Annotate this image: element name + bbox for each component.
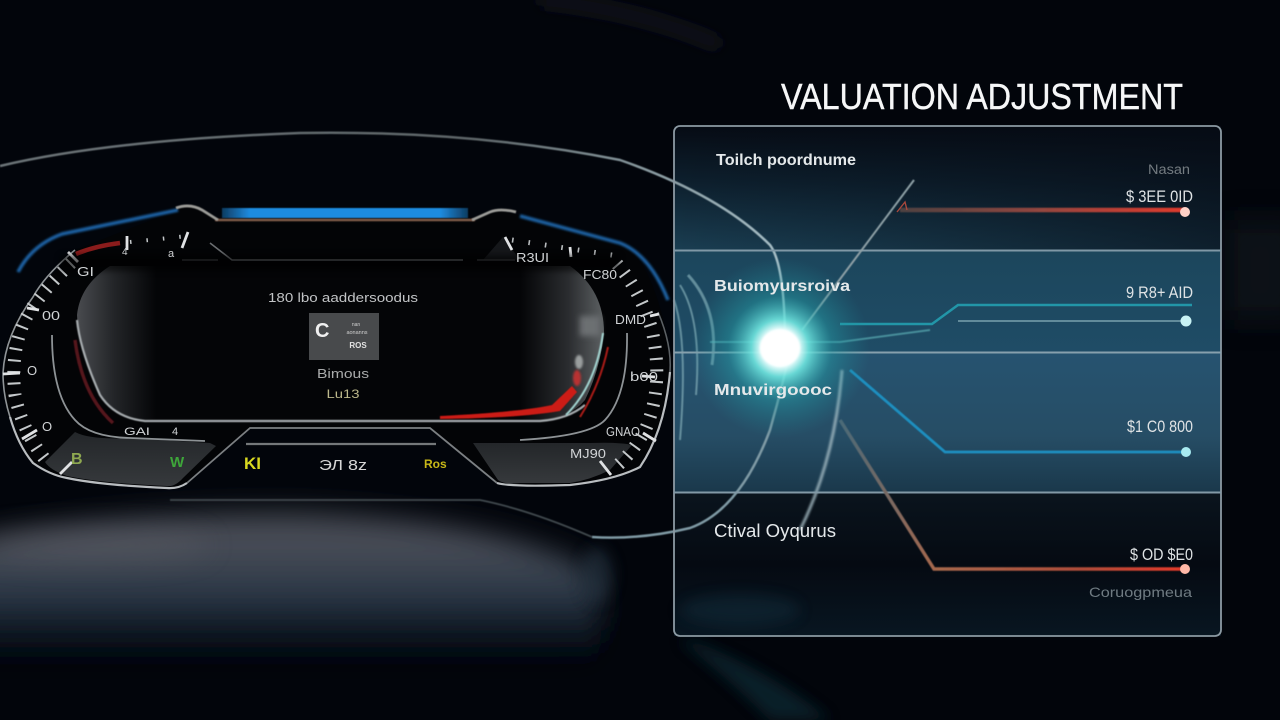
- card small label: nan: [352, 322, 360, 328]
- screen red accent outer right: [580, 347, 608, 417]
- value 2: 9 R8+ AID: [1126, 284, 1193, 302]
- teal upper end dot: [1180, 316, 1192, 326]
- right gauge ticks: [617, 264, 657, 465]
- title: VALUATION ADJUSTMENT: [781, 76, 1183, 117]
- central screen: [77, 266, 604, 420]
- gauge numerals left: 4: [172, 426, 178, 438]
- red top end dot: [1180, 207, 1190, 217]
- row 4 background: [674, 493, 1221, 636]
- left gauge ticks: [14, 262, 72, 458]
- card value: ROS: [349, 341, 367, 350]
- bottom glow: [680, 594, 800, 626]
- connector: red bottom: [840, 420, 1190, 574]
- screen sublabel: Lu13: [326, 387, 360, 401]
- background haze: right band: [1225, 220, 1280, 320]
- green indicators: B: [71, 451, 83, 468]
- right gauge needles: [505, 237, 659, 475]
- arcs around glow: [674, 275, 714, 440]
- gauge numerals left: 00: [42, 308, 60, 323]
- right bottom pod: [473, 443, 632, 484]
- screen heading: 180 lbo aaddersoodus: [268, 290, 419, 305]
- central light glow: [690, 258, 870, 438]
- value 4: $ OD $E0: [1130, 546, 1193, 564]
- bottom caption: Coruogpmeua: [1089, 584, 1192, 600]
- gauge numerals left: a: [168, 248, 175, 260]
- gauge numerals left: [27, 247, 178, 438]
- panel border and dividers: [674, 126, 1221, 636]
- screen centre card: [309, 313, 379, 360]
- screen top mask: [60, 255, 620, 271]
- row 1 background: [674, 126, 1221, 250]
- green indicators: [71, 451, 185, 471]
- screen red accent left: [75, 340, 113, 423]
- connector: blue middle: [850, 370, 1191, 457]
- row 1 label: Toilch poordnume: [716, 152, 856, 169]
- second lower curve: [800, 370, 842, 530]
- screen right highlight: [573, 316, 600, 386]
- row 3 background: [674, 353, 1221, 492]
- left red zone: [76, 243, 120, 254]
- yellow indicator left: KI: [244, 454, 261, 473]
- connector: teal upper: [710, 305, 1192, 342]
- centre readout: ЭЛ 8z: [319, 457, 367, 474]
- diagonal to glow: [802, 180, 914, 330]
- gauge numerals right: DMD: [615, 312, 646, 327]
- screen red accent bottom: [440, 386, 577, 419]
- gauge numerals left: GI: [77, 264, 94, 279]
- lower teal light sweep: [680, 640, 830, 720]
- screen bottom bezel: [77, 320, 585, 421]
- background haze: top streak: [540, 0, 720, 45]
- left gauge needles: [3, 232, 188, 474]
- dashboard surface below the cluster: [0, 500, 613, 680]
- connector: red top: [802, 180, 1190, 330]
- left bottom pod: [45, 432, 216, 486]
- gauge numerals right: FC80: [583, 267, 617, 282]
- cluster top hump bezel: [176, 206, 516, 220]
- value 1: $ 3EE 0ID: [1126, 188, 1193, 206]
- gauge numerals right: R3UI: [516, 250, 549, 265]
- gauge numerals left: GAI: [124, 426, 150, 438]
- cluster blue centre light: [222, 208, 468, 218]
- blue middle end dot: [1181, 447, 1191, 457]
- big arc to panel: [0, 133, 785, 345]
- values: [1089, 162, 1193, 600]
- screen top trapezoid bezel: [182, 237, 520, 260]
- right gauge top ticks: [512, 240, 618, 256]
- card icon: C: [315, 320, 329, 342]
- row 1 right shade: [674, 126, 1221, 250]
- panel: valuation table: [674, 126, 1221, 636]
- instrument cluster: [3, 205, 670, 488]
- row 3 label: Mnuvirgoooc: [714, 382, 832, 399]
- value 3: $1 C0 800: [1127, 418, 1193, 436]
- gauge numerals right: [516, 250, 658, 461]
- gauge numerals right: MJ90: [570, 446, 606, 461]
- top caption: Nasan: [1148, 162, 1190, 177]
- yellow indicator right: Ros: [424, 457, 447, 471]
- gauge numerals right: b00: [630, 369, 658, 384]
- row 2 label: Buiomyursroiva: [714, 278, 850, 295]
- lower curve from dashboard: [592, 360, 788, 538]
- gauge numerals right: GNAO: [606, 424, 640, 439]
- row labels: [714, 152, 856, 541]
- red bottom end dot: [1180, 564, 1190, 574]
- cluster blue top rim left: [18, 210, 178, 272]
- green indicators: W: [170, 454, 185, 471]
- gauge numerals left: O: [27, 363, 37, 378]
- cluster orange underglow: [215, 219, 475, 221]
- cluster outer ring: [3, 250, 670, 488]
- gauge numerals left: 4: [122, 247, 128, 258]
- row 2 background: [674, 251, 1221, 352]
- inner ring of cluster: [52, 333, 627, 441]
- cluster blue top rim right: [520, 216, 668, 300]
- gauge numerals left: O: [42, 419, 52, 434]
- bottom centre display top rule: [246, 443, 436, 445]
- row 4 label: Ctival Oyqurus: [714, 521, 836, 541]
- left gauge top ticks: [130, 236, 188, 242]
- cluster body: [4, 205, 670, 488]
- card small sublabel: aonanns: [346, 330, 368, 336]
- small marker: [897, 202, 907, 212]
- screen teal edge right: [566, 333, 603, 415]
- screen label: Bimous: [317, 367, 369, 381]
